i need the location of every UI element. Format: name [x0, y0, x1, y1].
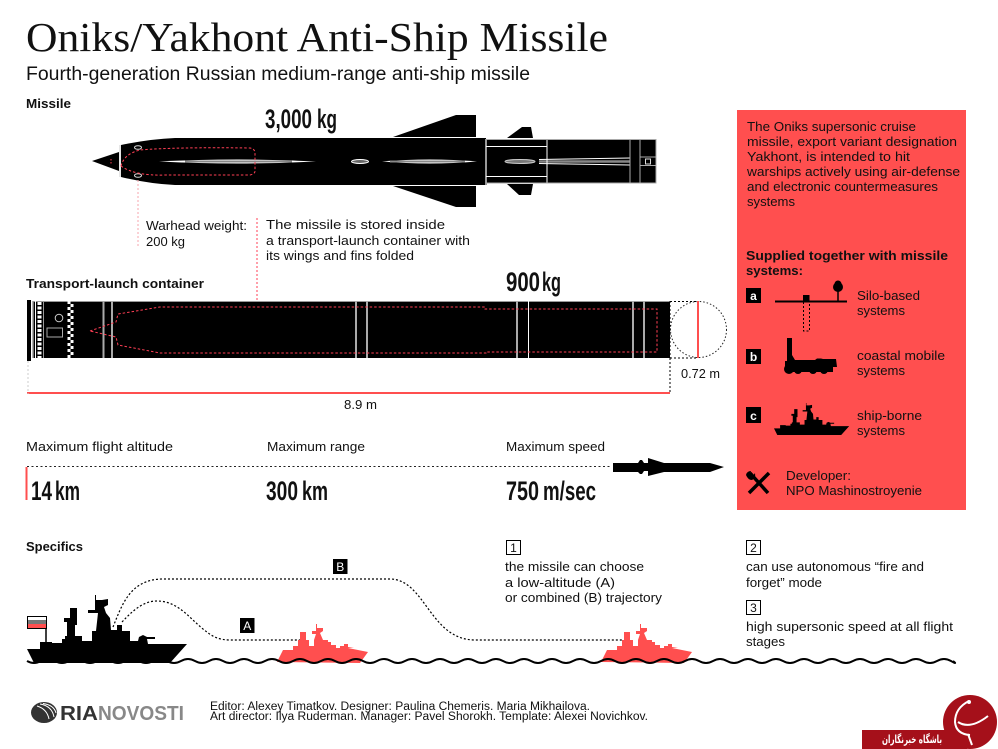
credits	[210, 701, 648, 723]
label B	[333, 559, 348, 574]
container cross-section	[670, 301, 726, 358]
specific 3: stages	[746, 634, 785, 649]
item c: ship-borne: c	[750, 409, 757, 423]
stat: speed: m/sec	[543, 476, 596, 506]
item a: silo-based: a	[750, 289, 757, 303]
panel subheading: Supplied together with missile	[746, 248, 948, 263]
container weight: kg	[542, 267, 561, 297]
storage note: The missile is stored inside	[266, 217, 445, 232]
container weight: 900	[506, 267, 540, 297]
panel intro text: warships actively using air-defense	[746, 164, 960, 179]
stat: altitude: km	[55, 476, 80, 506]
dotted altitude line	[27, 466, 612, 468]
specific 1: or combined (B) trajectory	[505, 590, 663, 605]
panel intro text: Yakhont, is intended to hit	[747, 149, 910, 164]
length label: 8.9 m	[344, 397, 377, 412]
stat: altitude: Maximum flight altitude	[26, 439, 173, 454]
badge: news club watermark	[862, 695, 997, 749]
label A: A	[243, 619, 251, 633]
item c: ship-borne: systems	[857, 423, 906, 438]
storage note: its wings and fins folded	[266, 248, 414, 263]
stat: speed: 750	[506, 476, 539, 506]
item a: silo-based	[746, 280, 920, 331]
sea waves	[27, 659, 955, 663]
missile weight: 3,000	[265, 104, 312, 134]
specific 2: can use autonomous “fire and	[746, 559, 924, 574]
panel intro text: The Oniks supersonic cruise	[747, 119, 916, 134]
credits: Art director: Ilya Ruderman. Manager: Pavel Shorokh. Template: Alexei Novichkov.	[210, 711, 648, 723]
subtitle: Fourth-generation Russian medium-range anti-ship missile	[26, 64, 530, 85]
stat: speed: Maximum speed	[506, 439, 605, 454]
missile weight: kg	[317, 104, 337, 134]
warhead weight label	[146, 218, 247, 249]
specific 2: forget” mode	[746, 575, 822, 590]
stat: range: Maximum range	[267, 439, 365, 454]
heading: missile: Missile	[26, 96, 71, 111]
diameter label: 0.72 m	[681, 366, 720, 381]
panel intro text	[746, 119, 960, 209]
warhead leader line	[137, 180, 139, 246]
specific 3	[746, 600, 953, 649]
icon: small missile	[613, 458, 724, 476]
missile drawing	[92, 115, 656, 207]
specific 1: a low-altitude (A)	[505, 575, 615, 590]
storage note	[266, 217, 470, 263]
stat: speed	[506, 439, 605, 506]
flag	[28, 616, 46, 642]
developer	[746, 468, 922, 498]
stat: range	[266, 439, 365, 506]
launching ship	[27, 595, 187, 663]
badge: news club watermark: باشگاه خبرنگاران	[882, 733, 942, 746]
credits: Editor: Alexey Timatkov. Designer: Paulina Chemeris. Maria Mikhailova.	[210, 701, 590, 713]
container drawing	[27, 300, 670, 361]
specific 3: 3	[750, 601, 757, 615]
developer: Developer:	[786, 468, 851, 483]
target ship 1	[277, 624, 368, 663]
warhead weight label: Warhead weight:	[146, 218, 247, 233]
item b: coastal mobile: b	[750, 350, 757, 364]
specific 3: high supersonic speed at all flight	[746, 619, 953, 634]
specific 2: 2	[750, 541, 757, 555]
panel intro text: missile, export variant designation	[747, 134, 957, 149]
panel intro text: systems	[747, 194, 796, 209]
label A	[240, 618, 254, 633]
logo: RIA Novosti	[31, 702, 184, 725]
developer: NPO Mashinostroyenie	[786, 483, 922, 498]
item b: coastal mobile: coastal mobile	[857, 348, 945, 363]
trajectory A	[122, 601, 300, 640]
storage note: a transport-launch container with	[266, 233, 470, 248]
logo: RIA Novosti: RIA	[60, 703, 98, 725]
item b: coastal mobile	[746, 338, 945, 378]
stat: range: km	[302, 476, 328, 506]
stat: range: 300	[266, 476, 298, 506]
storage leader line	[256, 218, 258, 306]
logo: RIA Novosti: NOVOSTI	[98, 703, 184, 725]
panel subheading: systems:	[746, 263, 803, 278]
length dimension line	[27, 358, 670, 394]
target ship 2	[601, 624, 692, 663]
item c: ship-borne: ship-borne	[857, 408, 922, 423]
trajectory B	[113, 579, 622, 640]
heading: specifics: Specifics	[26, 539, 83, 554]
panel intro text: and electronic countermeasures	[747, 179, 939, 194]
panel: description	[737, 110, 966, 510]
label B: B	[336, 560, 344, 574]
stat: altitude: 14	[31, 476, 52, 506]
warhead weight label: 200 kg	[146, 234, 185, 249]
item a: silo-based: Silo-based	[857, 288, 920, 303]
title: Oniks/Yakhont Anti-Ship Missile	[26, 14, 608, 60]
specific 1: the missile can choose	[505, 559, 644, 574]
specific 2	[746, 540, 924, 590]
specific 1	[505, 540, 663, 605]
stat: altitude	[26, 439, 173, 506]
panel subheading	[746, 248, 948, 278]
specific 1: 1	[510, 541, 517, 555]
item c: ship-borne	[746, 403, 922, 438]
item a: silo-based: systems	[857, 303, 906, 318]
item b: coastal mobile: systems	[857, 363, 906, 378]
heading: transport-launch container: Transport-launch container	[26, 276, 204, 291]
